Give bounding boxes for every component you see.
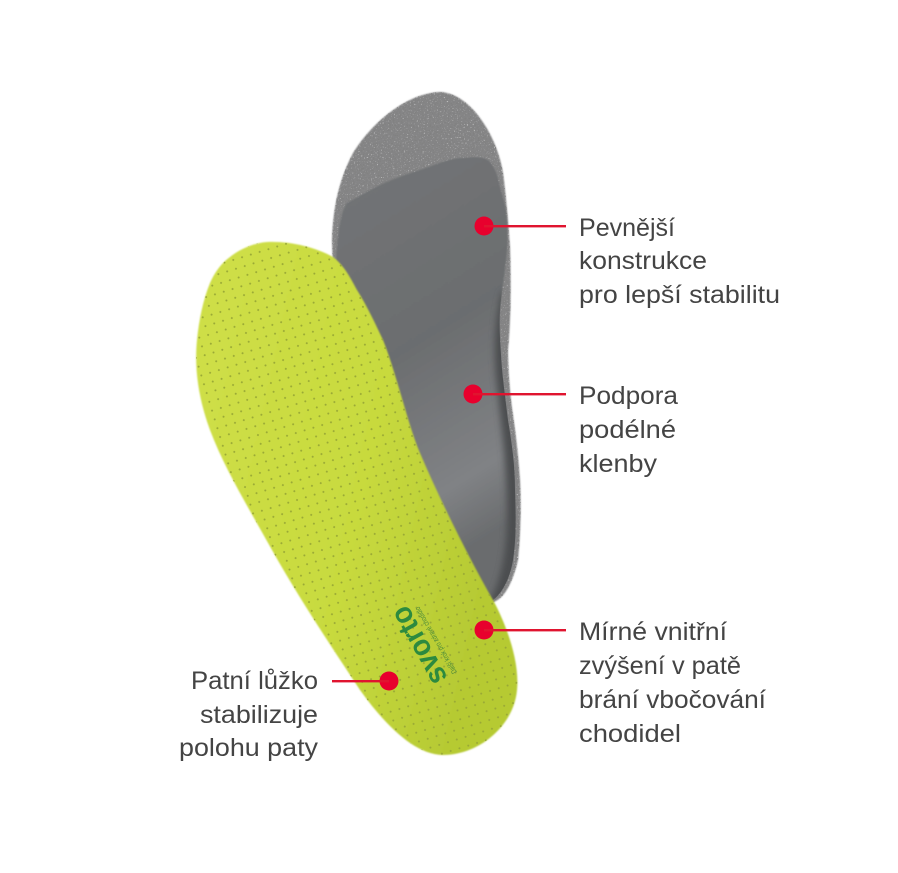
grey foam base [332,92,521,603]
callout: arch support [464,382,678,478]
label: pro lepší stabilitu [579,281,780,309]
label: Podpora [579,382,678,410]
label: klenby [579,450,658,478]
marker [380,672,398,690]
label: brání vbočování [579,686,766,714]
marker [474,216,494,236]
insole: grey underside [331,91,522,602]
label: stabilizuje [200,701,318,729]
foam light grain [332,92,520,598]
label: Pevnější [579,214,675,242]
insole: green top side [196,242,517,755]
logo: svorto: svorto [384,600,454,691]
label: chodidel [579,720,681,748]
label: polohu paty [179,734,319,762]
marker [474,620,494,640]
perforation dots [196,242,517,755]
label: zvýšení v patě [579,652,741,680]
leader line [473,393,566,395]
callout: firmer construction [474,214,780,309]
green surface [196,242,517,755]
logo tagline: Další krok pro zdravé chodidlo [413,605,459,676]
label: podélné [579,416,676,444]
dark support pad [336,157,516,602]
callout: heel cup [179,667,398,762]
label: Mírné vnitřní [579,618,727,646]
foam dark speckle [332,92,521,602]
label: konstrukce [579,247,707,275]
leader line [332,680,389,682]
callout: heel elevation [474,618,766,748]
leader line [484,629,566,631]
label: Patní lůžko [191,667,318,695]
marker [464,384,482,404]
arch shadow [491,291,516,600]
leader line [484,225,566,227]
